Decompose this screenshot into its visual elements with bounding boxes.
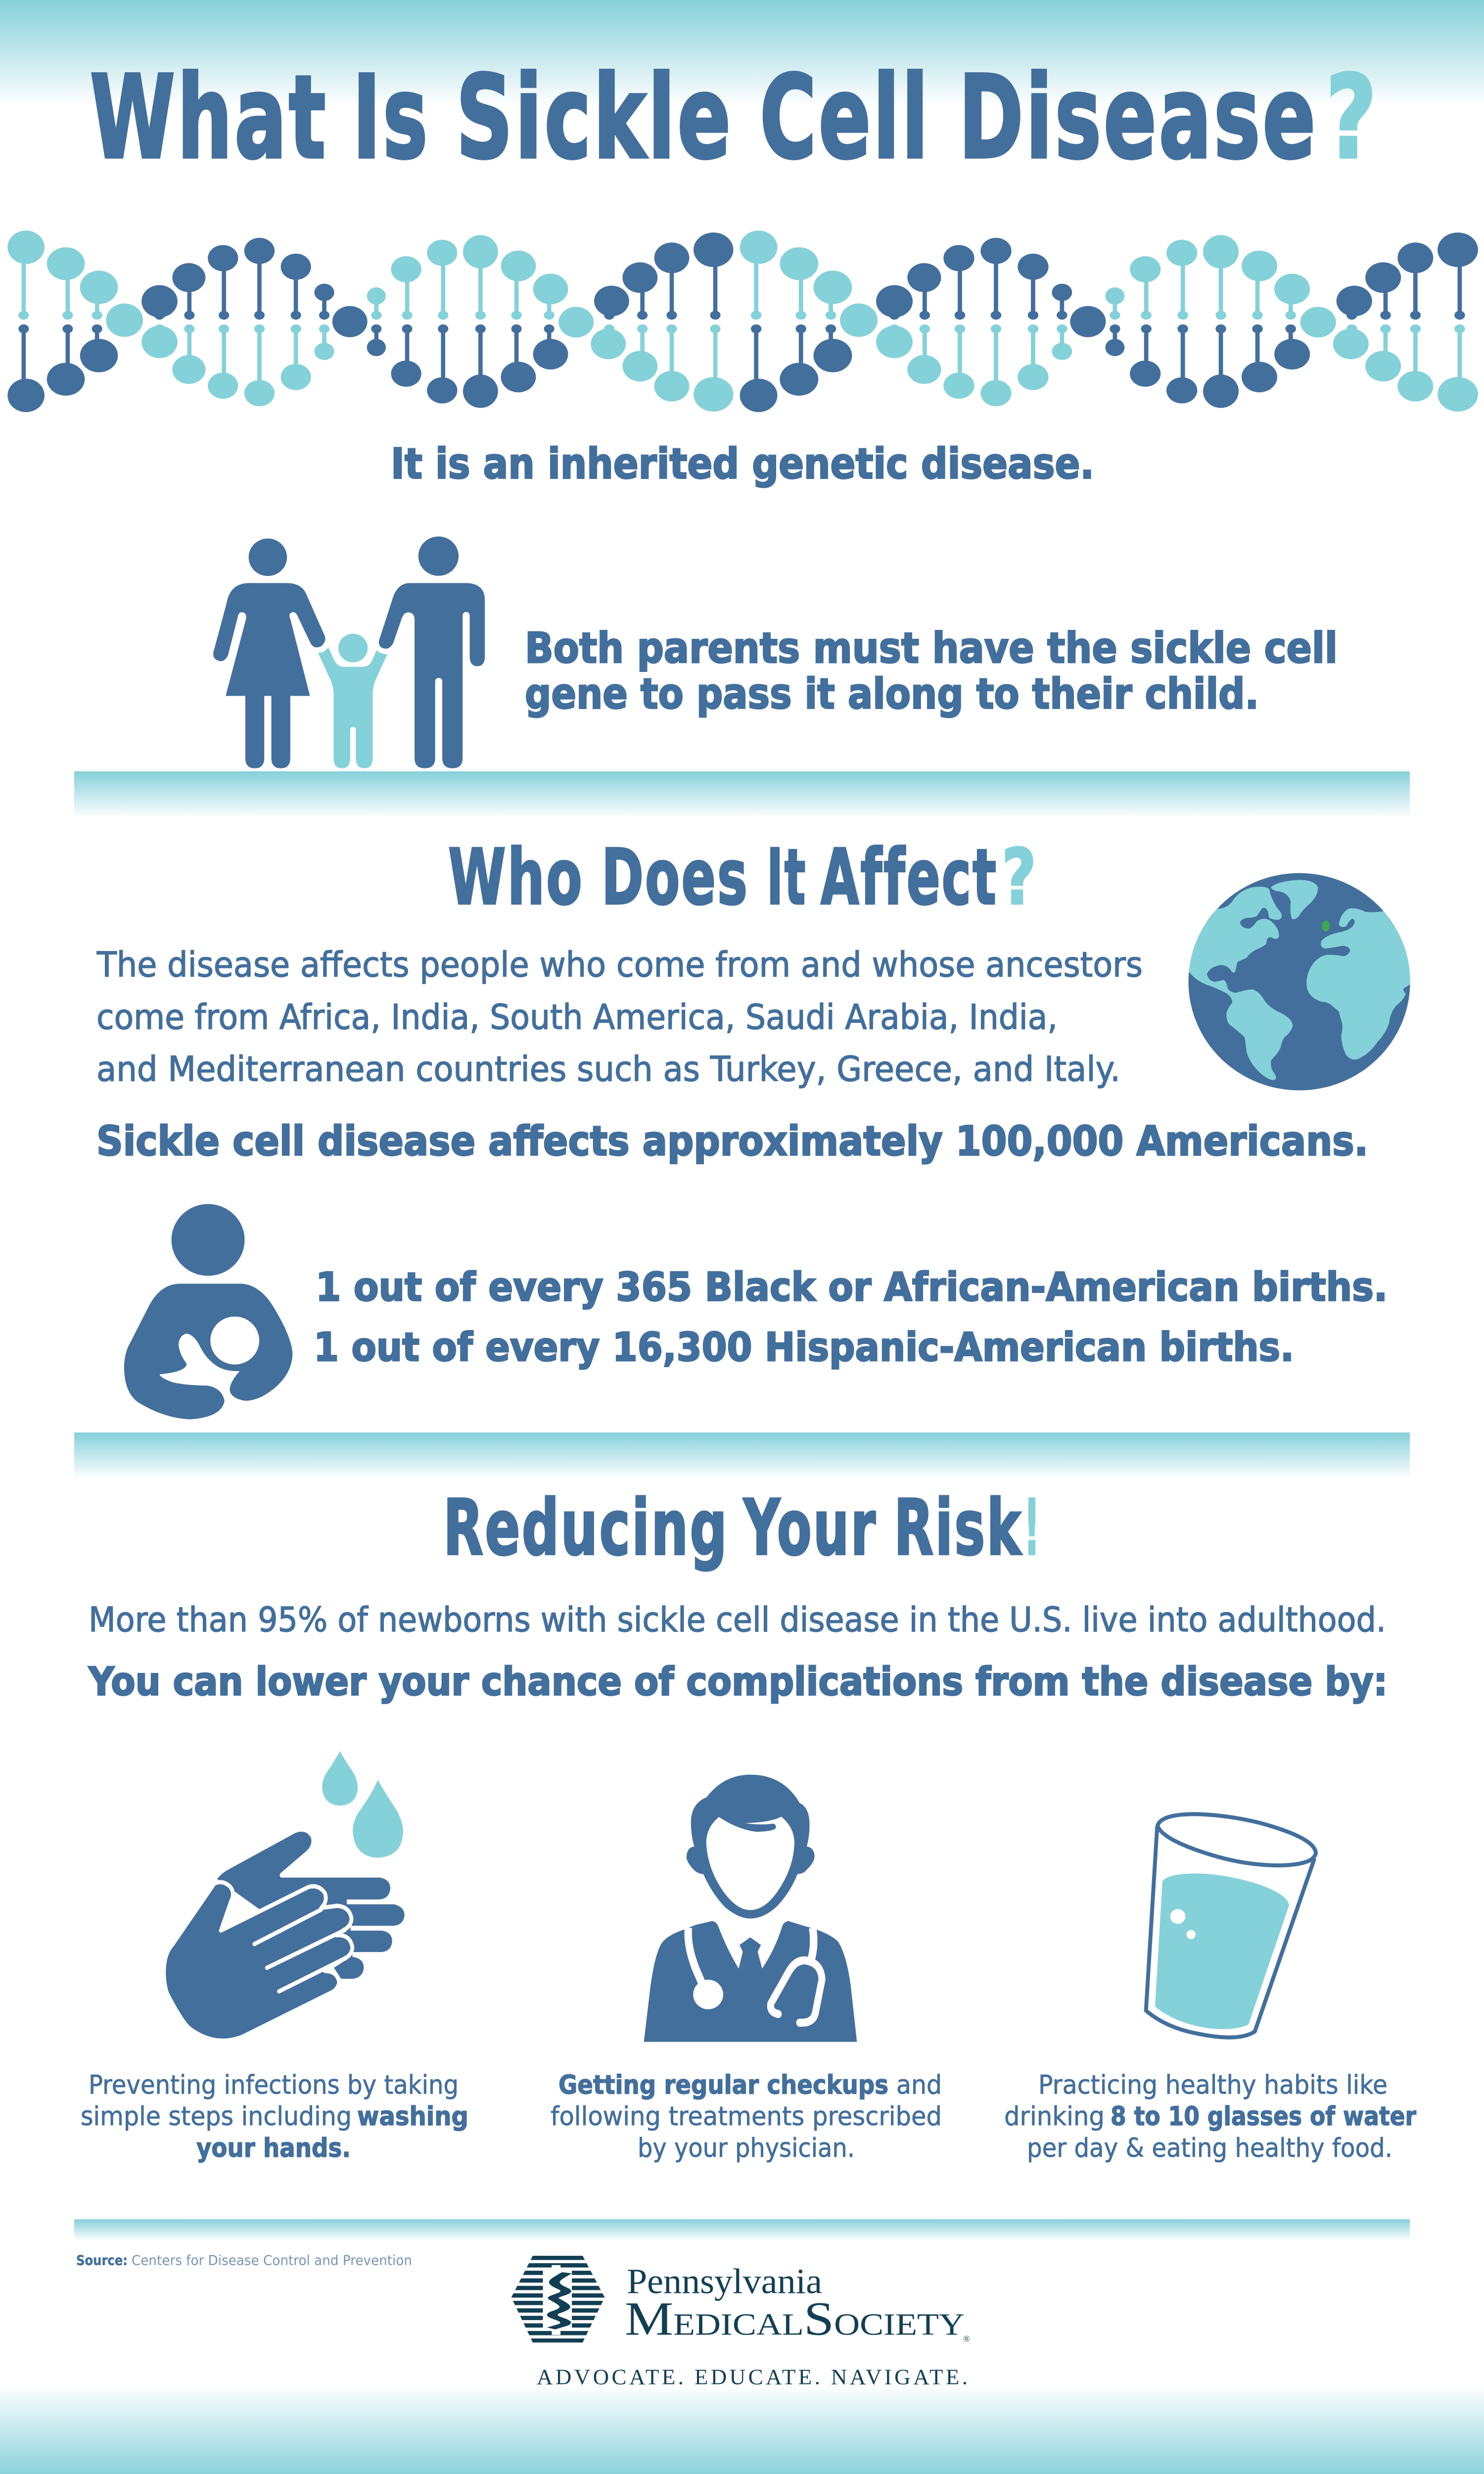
- source credit: Centers for Disease Control and Prevention: [132, 2252, 412, 2268]
- section divider band 3: [74, 2219, 1410, 2240]
- text: both parents must have the gene: gene to pass it along to their child.: [525, 670, 1259, 718]
- icon: mother holding baby: [124, 1204, 292, 1420]
- logo wordmark: MEDICAL SOCIETY: [625, 2292, 965, 2345]
- paragraph: who is affected: The disease affects people who come from and whose ancestors: [96, 945, 1143, 985]
- logo wordmark: [625, 2261, 970, 2345]
- caption: healthy habits: per day & eating healthy food.: [1027, 2132, 1392, 2163]
- caption: preventing infections: washing: [357, 2101, 468, 2132]
- logo: Pennsylvania Medical Society: [504, 2256, 970, 2389]
- paragraph: who is affected: [96, 945, 1143, 1089]
- text: both parents must have the gene: [525, 624, 1338, 718]
- caption: regular checkups: following treatments prescribed: [551, 2101, 942, 2132]
- infographic canvas: ?: [1002, 833, 1036, 922]
- paragraph: who is affected: and Mediterranean countries such as Turkey, Greece, and Italy.: [96, 1049, 1120, 1089]
- bottom gradient band: [0, 2386, 1484, 2474]
- caption: regular checkups: by your physician.: [638, 2132, 855, 2163]
- caption: healthy habits: [1004, 2069, 1417, 2163]
- icon: globe: [1185, 873, 1413, 1091]
- icon: family of two parents and a child: [213, 536, 485, 768]
- heading: reducing your risk: [443, 1483, 1040, 1572]
- heading: who does it affect: It: [767, 833, 807, 922]
- top gradient band: [0, 0, 1484, 107]
- text: both parents must have the gene: Both parents must have the sickle cell: [525, 624, 1338, 673]
- caption: healthy habits: Practicing healthy habits like: [1038, 2069, 1388, 2100]
- subtitle: inherited genetic disease: It is an inherited genetic disease.: [391, 440, 1094, 488]
- infographic canvas: !: [1024, 1483, 1040, 1572]
- DNA helix illustration: [7, 231, 1478, 412]
- caption: preventing infections: simple steps including: [81, 2101, 352, 2132]
- section divider band 1: [74, 771, 1410, 818]
- icon: glass of water: [1146, 1814, 1316, 2038]
- section divider band 2: [74, 1432, 1410, 1479]
- caption: preventing infections: your hands.: [196, 2132, 351, 2163]
- paragraph: who is affected: come from Africa, India, South America, Saudi Arabia, India,: [96, 997, 1058, 1037]
- source credit: Source:: [76, 2252, 128, 2268]
- caption: healthy habits: drinking: [1004, 2101, 1105, 2132]
- icon: doctor with stethoscope: [644, 1775, 857, 2042]
- logo tagline: ADVOCATE. EDUCATE. NAVIGATE.: [537, 2365, 968, 2389]
- caption: healthy habits: 8 to 10 glasses of water: [1111, 2101, 1417, 2132]
- title: Is: [353, 51, 430, 185]
- birth statistics: 1 out of every 365 Black or African-American births.: [316, 1264, 1388, 1310]
- heading: who does it affect: Who: [448, 833, 584, 922]
- caption: regular checkups: [551, 2069, 942, 2163]
- logo wordmark: Pennsylvania: [627, 2261, 822, 2301]
- birth statistics: 1 out of every 16,300 Hispanic-American births.: [314, 1325, 1294, 1370]
- birth statistics: [314, 1264, 1388, 1370]
- logo wordmark: ®: [963, 2334, 970, 2343]
- caption: regular checkups: and: [896, 2069, 942, 2100]
- caption: regular checkups: Getting regular checkups: [558, 2069, 888, 2100]
- caption: preventing infections: [81, 2069, 468, 2163]
- icon: washing hands with water drops: [164, 1751, 405, 2041]
- text: newborn survival: More than 95% of newborns with sickle cell disease in the U.S. live into adulthood.: [89, 1601, 1386, 1640]
- caption: preventing infections: Preventing infections by taking: [89, 2069, 459, 2100]
- logo emblem: [511, 2256, 604, 2342]
